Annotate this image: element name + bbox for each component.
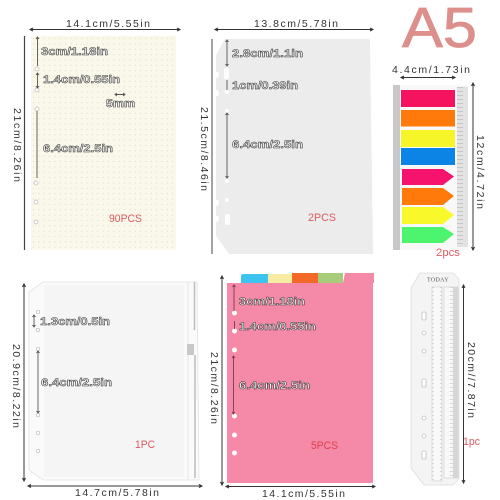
quantity: 1PC — [135, 439, 155, 451]
panel: sticky index flags — [392, 64, 486, 259]
panel: zipper pouch — [10, 282, 202, 499]
flag backing with ruler — [393, 85, 468, 250]
grid arrow — [115, 93, 125, 96]
height dimension: 20cm//7.87in — [465, 342, 477, 418]
height dimension — [462, 285, 477, 483]
height dimension: 21.5cm/8.46in — [198, 107, 210, 191]
height dimension — [472, 83, 486, 250]
panel: pink tabbed divider — [208, 273, 375, 500]
zipper — [187, 282, 195, 480]
width dimension: 14.1cm/5.55in — [262, 488, 345, 500]
label: 6.4cm: 6.4cm/2.5in — [239, 380, 310, 392]
binder holes — [232, 310, 237, 456]
rectangular flags — [401, 90, 455, 165]
label: 3cm: 3cm/1.18in — [41, 46, 108, 58]
hole spacing arrows — [232, 285, 236, 414]
panel: bookmark ruler — [411, 273, 480, 485]
label: 6.4cm: 6.4cm/2.5in — [232, 139, 303, 151]
width dimension — [28, 484, 202, 499]
quantity: 2PCS — [308, 212, 336, 224]
divider sheet — [216, 39, 373, 254]
label: 1.4cm: 1.4cm/0.55in — [239, 321, 316, 333]
width dimension: 14.7cm/5.78in — [75, 487, 159, 499]
height dimension: 21cm/8.26in — [208, 352, 220, 424]
width dimension — [30, 18, 180, 31]
width dimension: 13.8cm/5.78in — [254, 18, 338, 30]
label: 1.4cm: 1.4cm/0.55in — [43, 74, 120, 86]
label: 1cm: 1cm/0.39in — [232, 80, 298, 92]
width dimension: 14.1cm/5.55in — [66, 18, 150, 30]
hole spacing arrows — [36, 37, 39, 178]
ruler right tick strip — [444, 287, 458, 478]
dotted sheet — [31, 36, 176, 250]
label: 6.4cm: 6.4cm/2.5in — [43, 143, 113, 155]
label: 3cm: 3cm/1.18in — [239, 296, 305, 308]
quantity: 1pc — [463, 436, 480, 448]
label: 1.3cm: 1.3cm/0.5in — [40, 316, 110, 328]
colour tabs — [241, 273, 374, 283]
hole spacing arrows — [226, 40, 228, 178]
punched holes — [422, 312, 426, 459]
panel: plastic divider — [198, 18, 373, 254]
holes and notches — [216, 68, 230, 225]
arrow flags — [402, 169, 454, 243]
height dimension — [208, 276, 224, 485]
label: 5mm: 5mm — [106, 98, 135, 110]
width dimension — [226, 485, 375, 500]
binder holes — [36, 310, 40, 453]
panel: dotted paper — [11, 18, 180, 250]
quantity: 2pcs — [436, 247, 461, 259]
pouch window — [44, 285, 184, 477]
height dimension: 20.9cm/8.22in — [10, 344, 22, 428]
ruler body — [411, 273, 459, 485]
quantity: 90PCS — [109, 213, 142, 225]
height dimension: 12cm/4.72in — [474, 135, 486, 209]
width dimension — [215, 18, 373, 31]
pink sheet — [227, 283, 373, 483]
label: 2.8cm: 2.8cm/1.1in — [232, 48, 303, 60]
binder holes — [34, 67, 39, 224]
height dimension: 21cm/8.26in — [11, 108, 23, 182]
quantity: 5PCS — [311, 440, 338, 452]
pouch sheet — [29, 282, 199, 480]
label: 6.4cm: 6.4cm/2.5in — [41, 377, 112, 389]
hole spacing arrows — [32, 315, 40, 413]
ruler left tick strip — [432, 287, 442, 481]
width dimension: 4.4cm/1.73in — [392, 64, 470, 76]
ruler heading: TODAY — [427, 278, 449, 284]
height dimension — [10, 284, 26, 481]
